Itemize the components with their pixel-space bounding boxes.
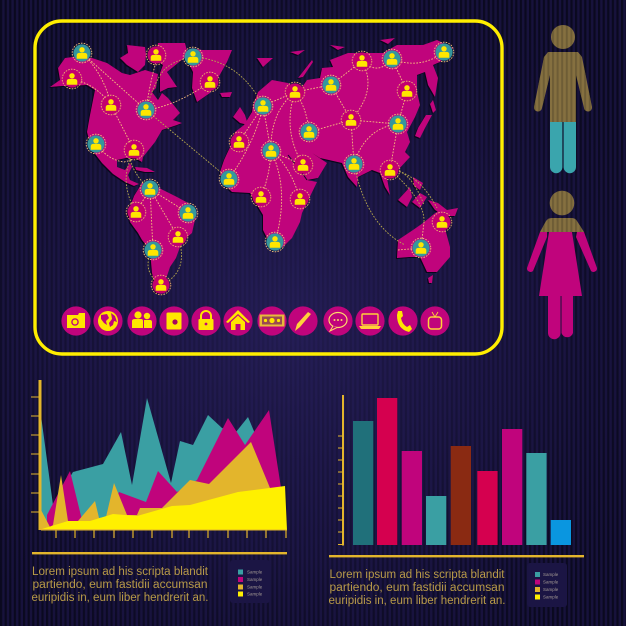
divider: area chart [32,552,287,554]
bars [353,421,373,545]
icon: speech bubble [323,306,353,336]
divider: bar chart [329,555,584,557]
legend: bar chart: Sample [543,572,559,577]
chart area: teal series [40,398,262,530]
legend: bar chart: Sample [543,580,559,584]
text: bar chart description: Lorem ipsum ad his scripta blandit [330,569,505,581]
legend: area chart: Sample [247,592,263,596]
chart axes [31,397,287,530]
pictogram: woman [527,191,597,339]
area chart [31,380,287,538]
legend: bar chart: Sample [543,594,559,600]
text: area chart description: Lorem ipsum ad his scripta blandit [32,566,209,578]
legend: bar chart: Sample [543,587,559,592]
text: area chart description: partiendo, eum fastidii accumsan [32,579,208,591]
icon: laptop [355,306,385,336]
red sea slit [288,155,307,180]
bar chart axis [342,395,344,546]
icon: pen [288,306,318,336]
legend: area chart: Sample [247,570,263,574]
map nodes: people markers [62,42,454,295]
bar chart [338,395,571,546]
panel: world map frame [35,21,502,354]
chart area: yellow series [42,486,287,530]
chart area: magenta series [47,410,284,530]
icon: banknote [257,306,287,336]
world map landmasses [50,38,458,293]
icon: globe [93,306,123,336]
icon: phone [388,306,418,336]
pictogram: man [534,25,592,173]
legend: bar chart [527,563,567,607]
icon: group of people [127,306,157,336]
network connection lines [72,52,444,250]
icon: camera [61,306,91,336]
text: area chart description [32,566,209,604]
icon: safe [159,306,189,336]
icon row [61,306,450,336]
legend: area chart [230,560,270,603]
icon: padlock [191,306,221,336]
legend: area chart: Sample [247,584,263,590]
network long-haul arcs [126,57,437,285]
icon: house [223,306,253,336]
text: bar chart description [328,569,506,607]
legend: area chart: Sample [247,577,263,582]
chart area: gold series [40,442,285,530]
text: area chart description: euripidis in, eum liber hendrerit an. [32,592,208,604]
icon: television [420,306,450,336]
text: bar chart description: partiendo, eum fastidii accumsan [330,582,504,594]
text: bar chart description: euripidis in, eum liber hendrerit an. [328,595,506,607]
